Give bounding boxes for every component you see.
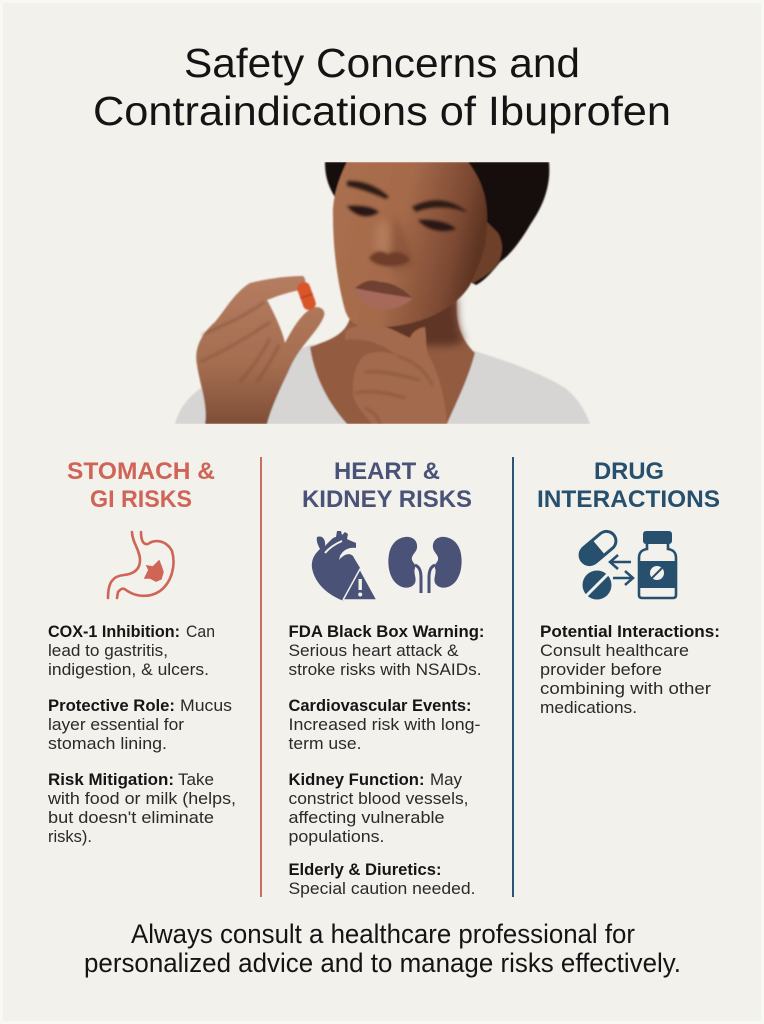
footer message: Always consult a healthcare professional for xyxy=(131,919,635,949)
text: COX-1 inhibition: lead to gastritis, xyxy=(48,641,168,660)
photo: concerned woman examining an orange pill xyxy=(175,162,590,424)
left hand holding pill xyxy=(196,276,324,424)
title: Safety Concerns and xyxy=(184,40,580,86)
eyes xyxy=(347,206,379,216)
icon: kidneys xyxy=(388,537,462,593)
text: risk mitigation: Take xyxy=(178,770,214,789)
text: potential interactions xyxy=(540,622,720,717)
panel: heart and kidney risks xyxy=(288,458,484,898)
text: FDA black box warning: FDA Black Box Warning: xyxy=(288,622,484,641)
text: kidney function: affecting vulnerable xyxy=(288,808,444,827)
text: kidney function: Kidney Function: xyxy=(288,770,424,789)
heading: heart and kidney xyxy=(302,458,472,513)
heading: drug interactions: INTERACTIONS xyxy=(537,486,720,513)
text: elderly and diuretics: Elderly & Diuretics: xyxy=(288,860,442,879)
lips xyxy=(355,280,412,298)
text: COX-1 inhibition: indigestion, & ulcers. xyxy=(48,660,209,679)
text: protective role: layer essential for xyxy=(48,715,184,734)
heading: stomach: GI RISKS xyxy=(90,486,192,513)
face xyxy=(333,162,487,328)
text: protective role: Protective Role: xyxy=(48,696,175,715)
heading: drug interactions: DRUG xyxy=(594,458,664,485)
divider: red xyxy=(260,457,262,897)
nose xyxy=(369,251,410,266)
right hand under chin xyxy=(345,325,447,424)
text: cardiovascular events xyxy=(288,696,480,753)
text: potential interactions: provider before xyxy=(540,660,662,679)
orange pill xyxy=(296,281,317,311)
panel: drug interactions xyxy=(537,458,720,717)
heading: heart and kidney: KIDNEY RISKS xyxy=(302,486,472,513)
footer message xyxy=(84,919,681,978)
text: kidney function xyxy=(288,770,468,846)
text: risk mitigation: with food or milk (helps, xyxy=(47,789,236,808)
brows xyxy=(347,181,389,199)
capsule xyxy=(574,525,622,571)
text: potential interactions: Consult healthcare xyxy=(540,641,689,660)
text: elderly and diuretics xyxy=(288,860,476,898)
text: FDA black box warning: stroke risks with NSAIDs. xyxy=(288,660,482,679)
cheek highlight and nose shadow xyxy=(388,221,412,271)
text: protective role: stomach lining. xyxy=(48,734,167,753)
text: FDA black box warning: Serious heart attack & xyxy=(288,641,459,660)
text: potential interactions: medications. xyxy=(540,698,637,717)
arrow right xyxy=(613,571,633,585)
text: protective role: Mucus xyxy=(180,696,232,715)
title: Contraindications of Ibuprofen xyxy=(93,88,671,134)
icon: heart with warning triangle xyxy=(312,531,377,601)
tablet xyxy=(582,570,612,600)
bottle xyxy=(643,531,672,544)
text: kidney function: populations. xyxy=(288,827,384,846)
text: cardiovascular events: Increased risk with long- xyxy=(288,715,480,734)
text: risk mitigation: Risk Mitigation: xyxy=(48,770,174,789)
text: kidney function: May xyxy=(430,770,462,789)
text: kidney function: constrict blood vessels, xyxy=(288,789,468,808)
text: risk mitigation xyxy=(47,770,236,846)
text: potential interactions: Potential Interactions: xyxy=(540,622,720,641)
icon: pills, arrows and bottle xyxy=(574,525,676,600)
divider: navy xyxy=(512,457,514,897)
icon: stomach with ulcer xyxy=(108,532,174,598)
neck and chest xyxy=(310,298,475,424)
text: COX-1 inhibition xyxy=(48,622,215,679)
warning triangle xyxy=(343,569,377,600)
text: COX-1 inhibition: COX-1 Inhibition: xyxy=(48,622,180,641)
hair xyxy=(325,162,549,285)
footer message: personalized advice and to manage risks effectively. xyxy=(84,948,681,978)
text: risk mitigation: but doesn't eliminate xyxy=(48,808,214,827)
ear shadow and ear xyxy=(470,222,502,284)
text: protective role xyxy=(48,696,232,753)
text: elderly and diuretics: Special caution needed. xyxy=(288,879,476,898)
text: COX-1 inhibition: Can xyxy=(186,622,215,641)
heading: stomach: STOMACH & xyxy=(67,458,215,485)
heading: heart and kidney: HEART & xyxy=(334,458,440,485)
title xyxy=(93,40,671,134)
shirt xyxy=(175,341,590,424)
arrow left xyxy=(610,555,631,569)
text: FDA black box warning xyxy=(288,622,484,679)
panel: stomach and GI risks xyxy=(47,458,236,846)
text: cardiovascular events: Cardiovascular Events: xyxy=(288,696,472,715)
heading: stomach xyxy=(67,458,215,513)
text: potential interactions: combining with other xyxy=(540,679,711,698)
heading: drug interactions xyxy=(537,458,720,513)
text: cardiovascular events: term use. xyxy=(288,734,362,753)
text: risk mitigation: risks). xyxy=(48,827,92,846)
